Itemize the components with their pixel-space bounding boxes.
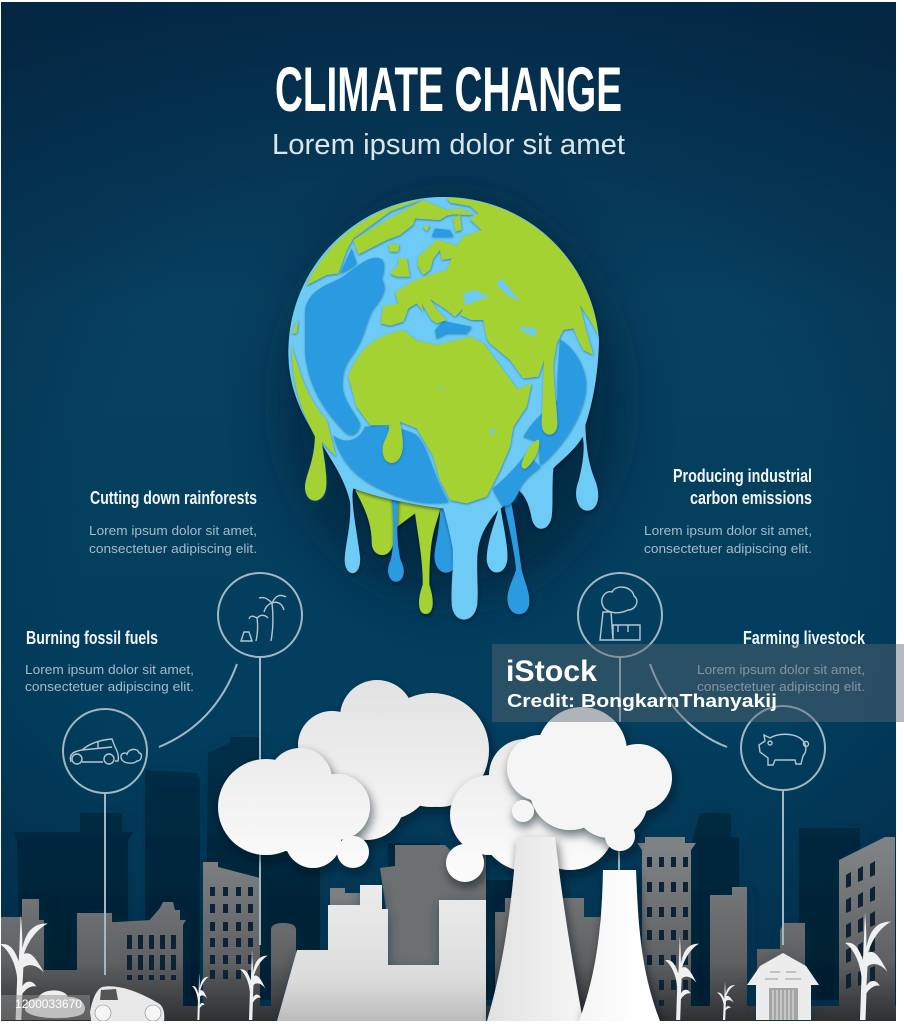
icon: palm trees in circle with connector (218, 573, 302, 945)
text block: farming livestock (697, 628, 866, 694)
cloud: right back (446, 739, 615, 882)
text block: cutting down rainforests: Lorem ipsum dolor sit amet, (89, 523, 257, 538)
icon: pig in circle with connector (741, 706, 825, 945)
green continents (292, 198, 598, 503)
building: behind barn (757, 923, 805, 1020)
building: gray block behind factory (380, 845, 486, 965)
building: tall left (203, 862, 260, 1020)
light blue melting sphere (288, 197, 599, 620)
text block: producing industrial carbon emissions: consectetuer adipiscing elit. (644, 541, 812, 556)
subtitle: Lorem ipsum dolor sit amet (272, 129, 625, 161)
continent: Greenland (353, 200, 473, 254)
text block: cutting down rainforests: Cutting down rainforests (90, 488, 257, 508)
text block: producing industrial carbon emissions: Lorem ipsum dolor sit amet, (644, 523, 812, 538)
building: behind towers (495, 898, 600, 1020)
text block: cutting down rainforests (89, 488, 257, 556)
building: windowed block (112, 902, 186, 1020)
icon: car in circle with connector (63, 709, 147, 975)
arc connector: right (650, 664, 727, 747)
text block: producing industrial carbon emissions (644, 466, 812, 556)
building: right tall slanted (839, 837, 895, 1021)
text block: farming livestock: Lorem ipsum dolor sit amet, (697, 662, 865, 677)
globe shadow (282, 200, 622, 600)
title: CLIMATE CHANGE (275, 55, 622, 125)
dead trees (0, 913, 891, 1020)
continent: Britain (390, 258, 410, 277)
barn (747, 953, 819, 1020)
arc connector: left (159, 664, 237, 747)
text block: burning fossil fuels: Lorem ipsum dolor sit amet, (25, 662, 194, 677)
text block: producing industrial carbon emissions: Producing industrial (673, 466, 812, 486)
watermark banner: iStock (506, 655, 597, 688)
white cloud at ground (25, 990, 85, 1018)
building: tower block with cap (637, 837, 696, 1020)
cloud: back large (298, 680, 489, 840)
ground car (90, 986, 164, 1021)
white factory (277, 885, 486, 1021)
watermark banner: Credit: BongkarnThanyakij (507, 691, 777, 711)
cooling tower: left (487, 837, 583, 1021)
text block: farming livestock: Farming livestock (743, 628, 866, 648)
continent: Madagascar (522, 439, 539, 469)
back blue drips (388, 490, 529, 614)
back green drips (355, 480, 443, 614)
continent: Iceland (388, 244, 399, 252)
continent: arctic islands (423, 215, 462, 232)
watermark banner (492, 644, 904, 722)
continent: left rim (292, 318, 298, 333)
dark blue oceans (305, 228, 586, 506)
continent: Eurasia (381, 198, 598, 435)
building: small rounded (271, 923, 296, 1020)
continent: South America edge (292, 343, 336, 501)
text block: farming livestock: consectetuer adipiscing elit. (697, 679, 865, 694)
text block: producing industrial carbon emissions: carbon emissions (690, 488, 812, 508)
icon: factory in circle with connector (578, 573, 662, 872)
text block: burning fossil fuels: consectetuer adipiscing elit. (25, 679, 194, 694)
gray city buildings (1, 837, 896, 1021)
building: gray behind left factory (330, 888, 360, 908)
text block: burning fossil fuels (25, 628, 194, 694)
text block: cutting down rainforests: consectetuer adipiscing elit. (89, 541, 257, 556)
cooling tower: right (579, 870, 660, 1021)
image id stamp: 1200033670 (15, 997, 82, 1011)
background skyline (13, 737, 860, 1010)
cloud: left front (218, 748, 370, 868)
continent: Africa (348, 330, 532, 503)
image id stamp (1, 995, 90, 1020)
text block: burning fossil fuels: Burning fossil fuels (26, 628, 158, 648)
melting globe (288, 197, 599, 620)
ground strip (1, 1006, 896, 1021)
cloud: right front (507, 707, 672, 851)
building: right mid (710, 887, 747, 1020)
inland seas (438, 278, 537, 435)
continent: North America (306, 199, 423, 286)
building: left block (1, 899, 112, 1020)
